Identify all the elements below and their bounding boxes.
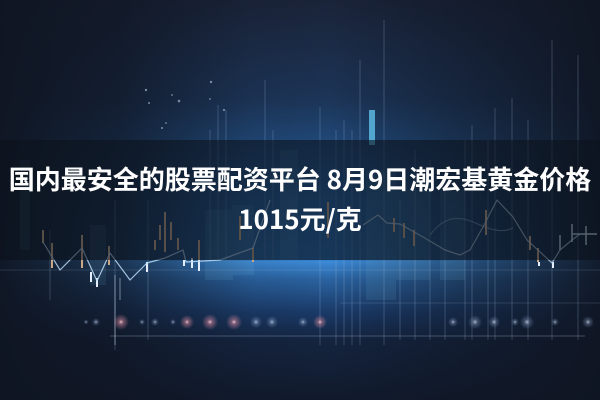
candlesticks <box>43 202 597 287</box>
title: 1015元/克 <box>238 200 362 237</box>
trend lines <box>43 200 597 345</box>
title: 国内最安全的股票配资平台 8月9日潮宏基黄金价格 <box>9 160 591 197</box>
star dots <box>145 81 225 129</box>
horizontal rules <box>0 270 600 336</box>
dark title band <box>0 140 600 260</box>
glowing lights <box>84 314 594 330</box>
vertical light lines <box>50 20 578 350</box>
title <box>9 160 591 237</box>
city towers <box>20 150 465 300</box>
